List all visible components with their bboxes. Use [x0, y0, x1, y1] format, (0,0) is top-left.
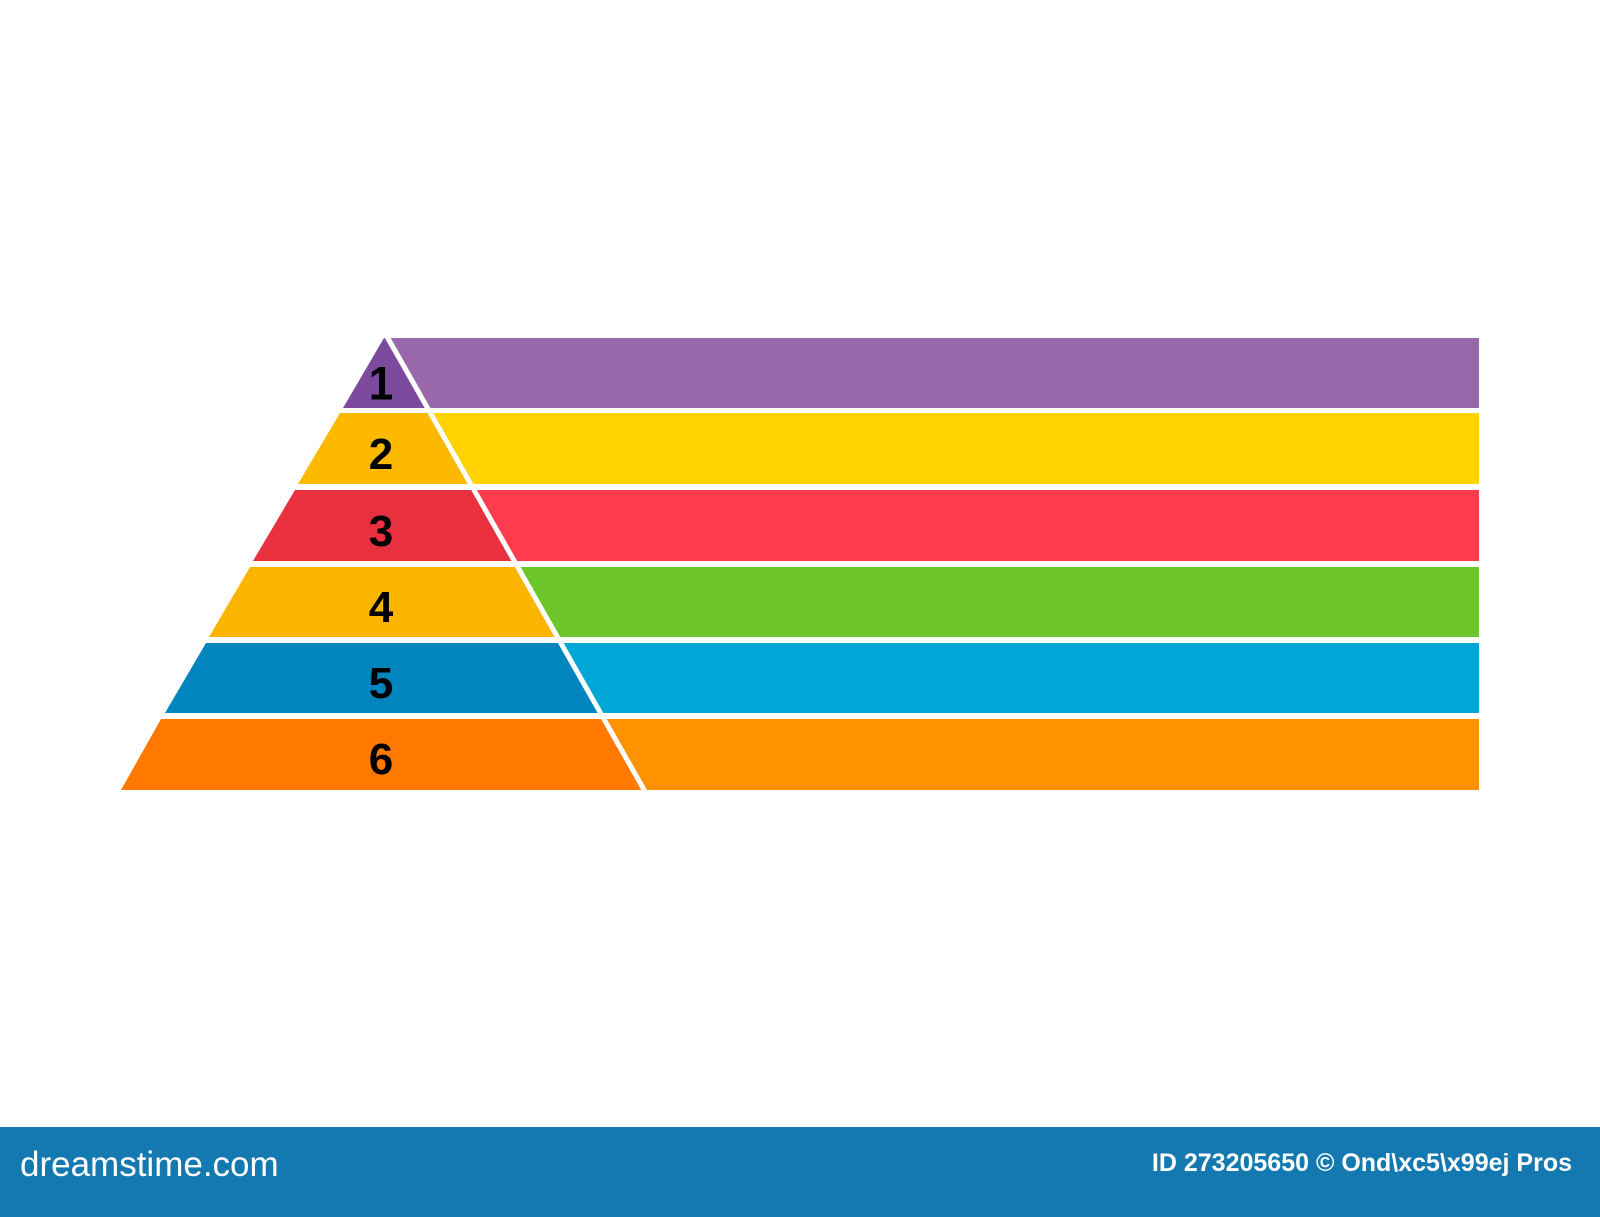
- row 5: 5: [369, 659, 393, 708]
- row 3: [253, 490, 1479, 561]
- footer bar: [0, 1127, 1600, 1217]
- row 4: [209, 567, 1479, 637]
- row 1: [343, 338, 1479, 410]
- row 3: 3: [369, 507, 393, 556]
- row 6: 6: [369, 735, 393, 784]
- row 2: 2: [369, 430, 393, 479]
- row 4: 4: [369, 583, 394, 632]
- footer credit: ID 273205650 © Ond\xc5\x99ej Pros: [1152, 1149, 1572, 1177]
- row 6: [121, 719, 1479, 790]
- footer logo: dreamstime.com: [20, 1145, 279, 1184]
- row 5: [165, 643, 1479, 713]
- row 2: [298, 413, 1479, 484]
- row 1: 1: [369, 357, 393, 410]
